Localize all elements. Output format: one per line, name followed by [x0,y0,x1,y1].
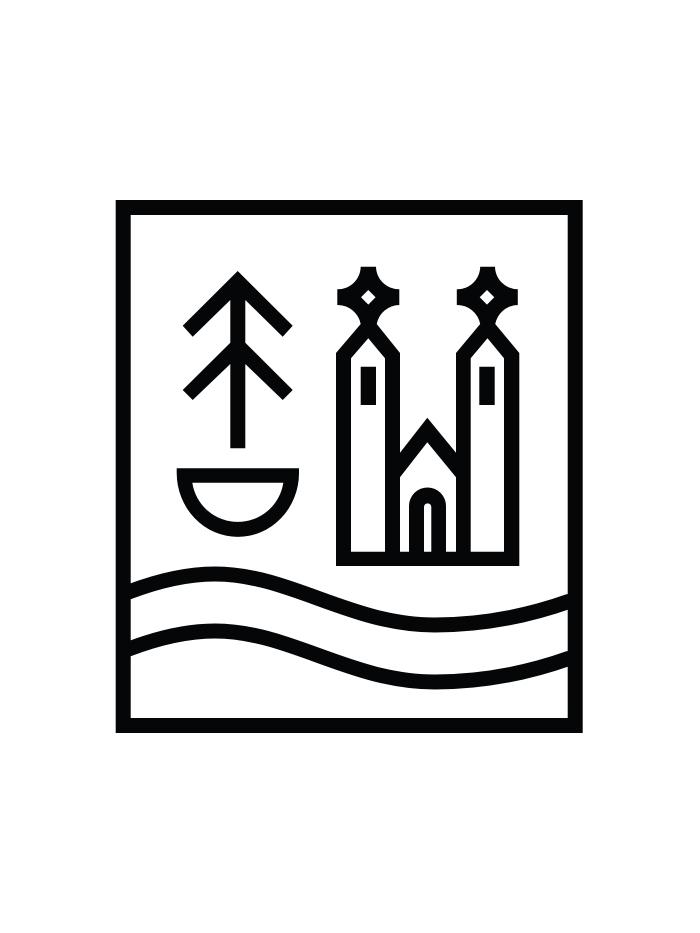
square frame [123,208,575,726]
upper wave [128,574,570,625]
icon: bowl [177,468,299,537]
river waves [128,574,570,682]
left tower with cross [336,267,400,566]
central nave with arched door [400,418,456,566]
right tower with cross [456,267,519,566]
icon: twin-towered church [336,267,519,566]
icon: fir tree [183,271,293,448]
lower wave [128,631,570,682]
